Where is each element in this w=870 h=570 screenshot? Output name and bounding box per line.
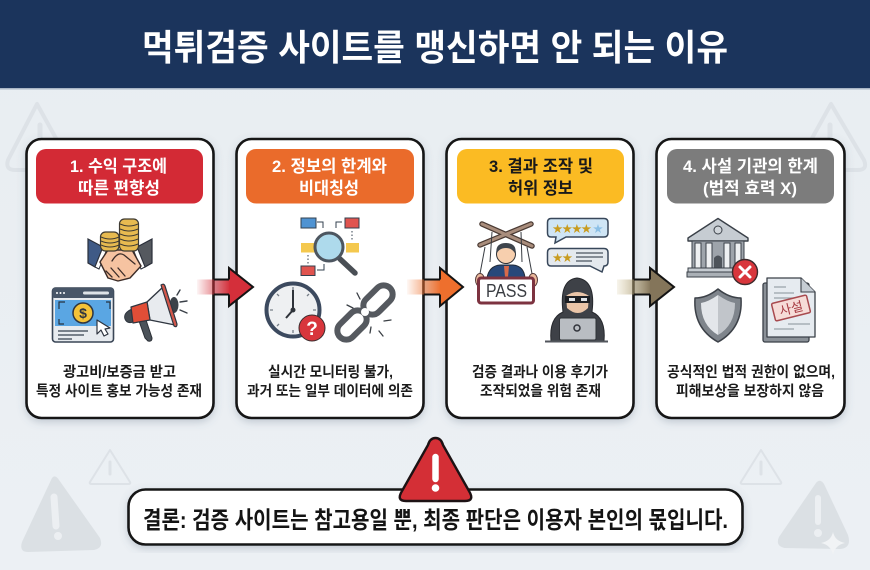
background warning triangles bbox=[7, 104, 865, 555]
card 4 text: 피해보상을 보장하지 않음 bbox=[676, 383, 824, 400]
card 4 header bbox=[667, 149, 834, 204]
card 3 header: 3. 결과 조작 및 bbox=[489, 157, 593, 176]
card 1 text bbox=[36, 364, 202, 400]
callout: conclusion bbox=[128, 490, 742, 544]
icon: document with stamp bbox=[763, 278, 815, 342]
arrow: card 1 to card 2 bbox=[197, 268, 253, 306]
card 3 header bbox=[457, 149, 624, 204]
icon: clock with question mark: ? bbox=[306, 319, 318, 340]
title: 먹튀검증 사이트를 맹신하면 안 되는 이유 bbox=[142, 27, 728, 68]
icon: warning triangle bbox=[400, 438, 471, 501]
panel: card 4 bbox=[656, 139, 844, 418]
card 3 header: 허위 정보 bbox=[508, 179, 573, 198]
icon: review bubbles: ★★★★ bbox=[552, 221, 592, 236]
card 2 text: 실시간 모니터링 불가, bbox=[268, 364, 393, 381]
conclusion text: 결론: 검증 사이트는 참고용일 뿐, 최종 판단은 이용자 본인의 몫입니다. bbox=[143, 507, 728, 533]
card 2 text bbox=[247, 364, 413, 400]
icon: puppet with pass sign bbox=[476, 224, 538, 303]
icon: document with stamp: 사설 bbox=[778, 298, 805, 319]
icon: bank with x badge bbox=[687, 218, 758, 284]
card 1 header: 1. 수익 구조에 bbox=[70, 157, 167, 176]
panel: card 2 bbox=[236, 139, 424, 418]
card 1 header: 따른 편향성 bbox=[78, 179, 160, 198]
card 2 header bbox=[246, 149, 414, 204]
card 3 text: 조작되었을 위험 존재 bbox=[480, 383, 601, 400]
icon: handshake with coins bbox=[88, 219, 152, 281]
card 4 header: 4. 사설 기관의 한계 bbox=[683, 157, 818, 176]
arrow: card 2 to card 3 bbox=[407, 268, 463, 306]
icon: review bubbles: ★★ bbox=[552, 250, 573, 265]
icon: hooded hacker bbox=[545, 278, 608, 342]
icon: broken chain bbox=[334, 282, 396, 343]
card 4 header: (법적 효력 X) bbox=[703, 179, 797, 198]
icon: data nodes with magnifier bbox=[301, 218, 359, 276]
icon: browser with dollar bbox=[52, 288, 114, 342]
card 1 text: 특정 사이트 홍보 가능성 존재 bbox=[36, 383, 202, 400]
card 3 text: 검증 결과나 이용 후기가 bbox=[472, 364, 608, 381]
panel: card 1 bbox=[26, 139, 214, 418]
icon: shield bbox=[695, 289, 741, 342]
header band bbox=[0, 0, 870, 90]
icon: clock with question mark bbox=[266, 284, 325, 341]
card 3 text bbox=[472, 364, 608, 400]
panel: card 3 bbox=[446, 139, 634, 418]
card 4 text bbox=[667, 364, 835, 400]
card 2 header: 비대칭성 bbox=[299, 179, 359, 198]
card 2 header: 2. 정보의 한계와 bbox=[272, 157, 387, 176]
card 4 text: 공식적인 법적 권한이 없으며, bbox=[667, 364, 835, 381]
card 1 text: 광고비/보증금 받고 bbox=[63, 364, 176, 381]
icon: review bubbles bbox=[548, 218, 608, 272]
icon: browser with dollar: $ bbox=[79, 305, 87, 321]
icon: megaphone bbox=[125, 284, 187, 341]
card 2 text: 과거 또는 일부 데이터에 의존 bbox=[247, 383, 413, 400]
icon: review bubbles: ★ bbox=[592, 221, 604, 236]
card 1 header bbox=[36, 149, 203, 204]
icon: puppet with pass sign: PASS bbox=[486, 281, 527, 301]
arrow: card 3 to card 4 bbox=[617, 268, 674, 306]
